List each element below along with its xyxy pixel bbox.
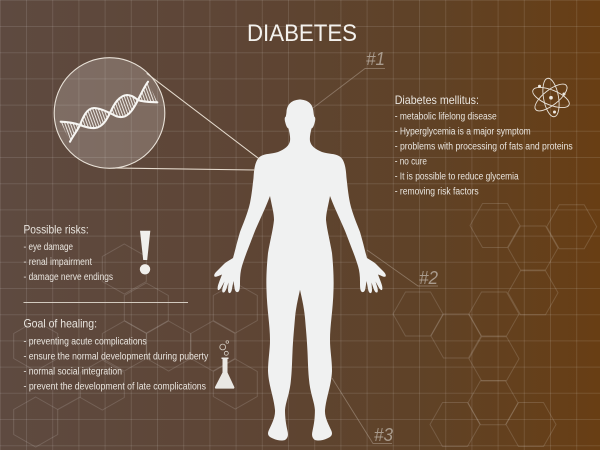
text block: Diabetes mellitus bbox=[395, 94, 573, 197]
text block: Possible risks: - damage nerve endings bbox=[24, 272, 113, 283]
text block: Possible risks: - renal impairment bbox=[24, 257, 92, 268]
text block: Goal of healing: - normal social integration bbox=[24, 366, 122, 377]
text block: Diabetes mellitus: - Hyperglycemia is a major symptom bbox=[395, 126, 531, 137]
hexagon pattern: left group bbox=[14, 244, 257, 447]
text block: Goal of healing: Goal of healing: bbox=[24, 318, 97, 331]
text block: Possible risks: - eye damage bbox=[24, 242, 73, 253]
text block: Diabetes mellitus: - no cure bbox=[395, 156, 427, 167]
text block: Goal of healing: - preventing acute complications bbox=[24, 336, 147, 347]
icon: DNA helix bbox=[61, 82, 157, 142]
callout #1: #1 bbox=[366, 49, 385, 69]
human body silhouette bbox=[214, 100, 386, 440]
text block: Diabetes mellitus: - problems with processing of fats and proteins bbox=[395, 141, 573, 152]
icon: atom bbox=[530, 77, 572, 118]
icon: exclamation mark bbox=[140, 231, 150, 274]
text block: Diabetes mellitus: - It is possible to reduce glycemia bbox=[395, 171, 519, 182]
text block: Goal of healing: - prevent the development of late complications bbox=[24, 381, 206, 392]
callout #2: #2 bbox=[419, 268, 438, 288]
title: DIABETES bbox=[247, 20, 357, 47]
text block: Diabetes mellitus: - metabolic lifelong disease bbox=[395, 111, 497, 122]
callout #1 bbox=[313, 49, 385, 108]
text block: Possible risks: Possible risks: bbox=[24, 223, 89, 236]
text block: Diabetes mellitus: - removing risk factors bbox=[395, 186, 479, 197]
text block: Goal of healing bbox=[24, 318, 208, 392]
callout #2 bbox=[367, 250, 438, 288]
magnifier: zoom lines and lens bbox=[54, 58, 260, 170]
text block: Goal of healing: - ensure the normal development during puberty bbox=[24, 351, 208, 362]
hexagon pattern: right group bbox=[393, 204, 597, 446]
callout #3 bbox=[332, 378, 393, 445]
text block: Diabetes mellitus: Diabetes mellitus: bbox=[395, 94, 479, 107]
icon: lab flask with bubbles bbox=[215, 341, 234, 389]
text block: Possible risks bbox=[24, 223, 113, 283]
callout #3: #3 bbox=[374, 425, 393, 445]
